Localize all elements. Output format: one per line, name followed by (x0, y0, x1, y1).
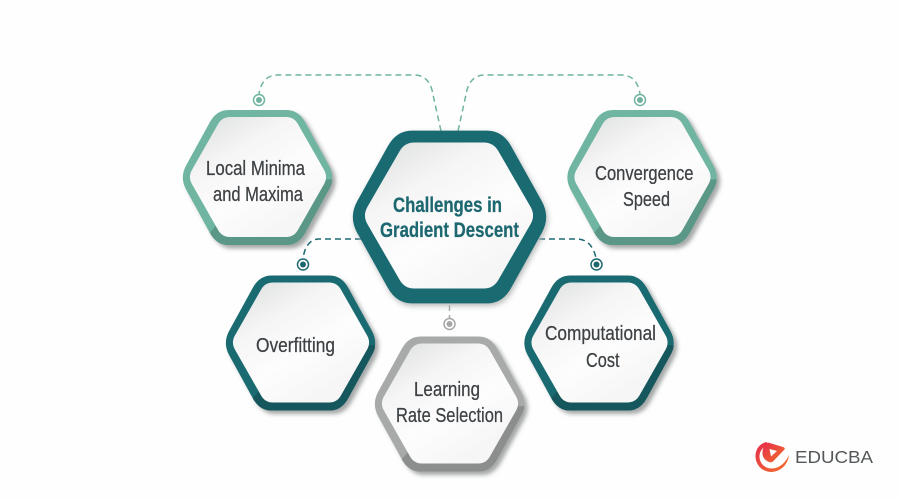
wordmark: EDUCBA (795, 447, 873, 467)
label: Overfitting: Overfitting (256, 334, 335, 357)
label: Learning Rate Selection (396, 378, 503, 427)
node marker: Convergence Speed (634, 94, 646, 106)
label: Convergence Speed (595, 162, 694, 211)
label: Computational Cost: Cost (586, 349, 620, 372)
label: Local Minima and Maxima: and Maxima (213, 183, 303, 206)
hexagon: Local Minima and Maxima (183, 110, 336, 248)
label: Learning Rate Selection: Learning (414, 378, 480, 401)
label: Computational Cost: Computational (545, 322, 656, 345)
central hexagon: Challenges in Gradient Descent (353, 131, 548, 306)
node marker: Computational Cost (591, 259, 602, 270)
logo: EDUCBA (756, 442, 873, 472)
node marker: Overfitting (298, 259, 308, 270)
hexagon: Learning Rate Selection (375, 336, 528, 475)
hexagon: Computational Cost (524, 276, 677, 414)
label: Convergence Speed: Speed (623, 188, 670, 211)
connector: centre to Learning Rate Selection (448, 305, 450, 318)
connector: centre to Overfitting (303, 239, 361, 258)
node marker: Learning Rate Selection (444, 318, 455, 330)
icon: EDUCBA mark (756, 442, 789, 472)
title: Challenges in (393, 194, 502, 217)
node marker: Local Minima (254, 94, 264, 106)
connector: centre to Convergence Speed (458, 75, 640, 131)
title: Gradient Descent (380, 219, 519, 242)
label: Convergence Speed: Convergence (595, 162, 694, 185)
label: Learning Rate Selection: Rate Selection (396, 404, 503, 427)
connector: centre to Local Minima (259, 75, 441, 131)
title (380, 194, 519, 242)
label: Local Minima and Maxima (206, 157, 305, 206)
hexagon: Overfitting (226, 276, 379, 414)
connector: centre to Computational Cost (539, 239, 596, 258)
hexagon: Convergence Speed (567, 110, 720, 248)
label: Computational Cost (545, 322, 656, 372)
label: Local Minima and Maxima: Local Minima (206, 157, 305, 180)
